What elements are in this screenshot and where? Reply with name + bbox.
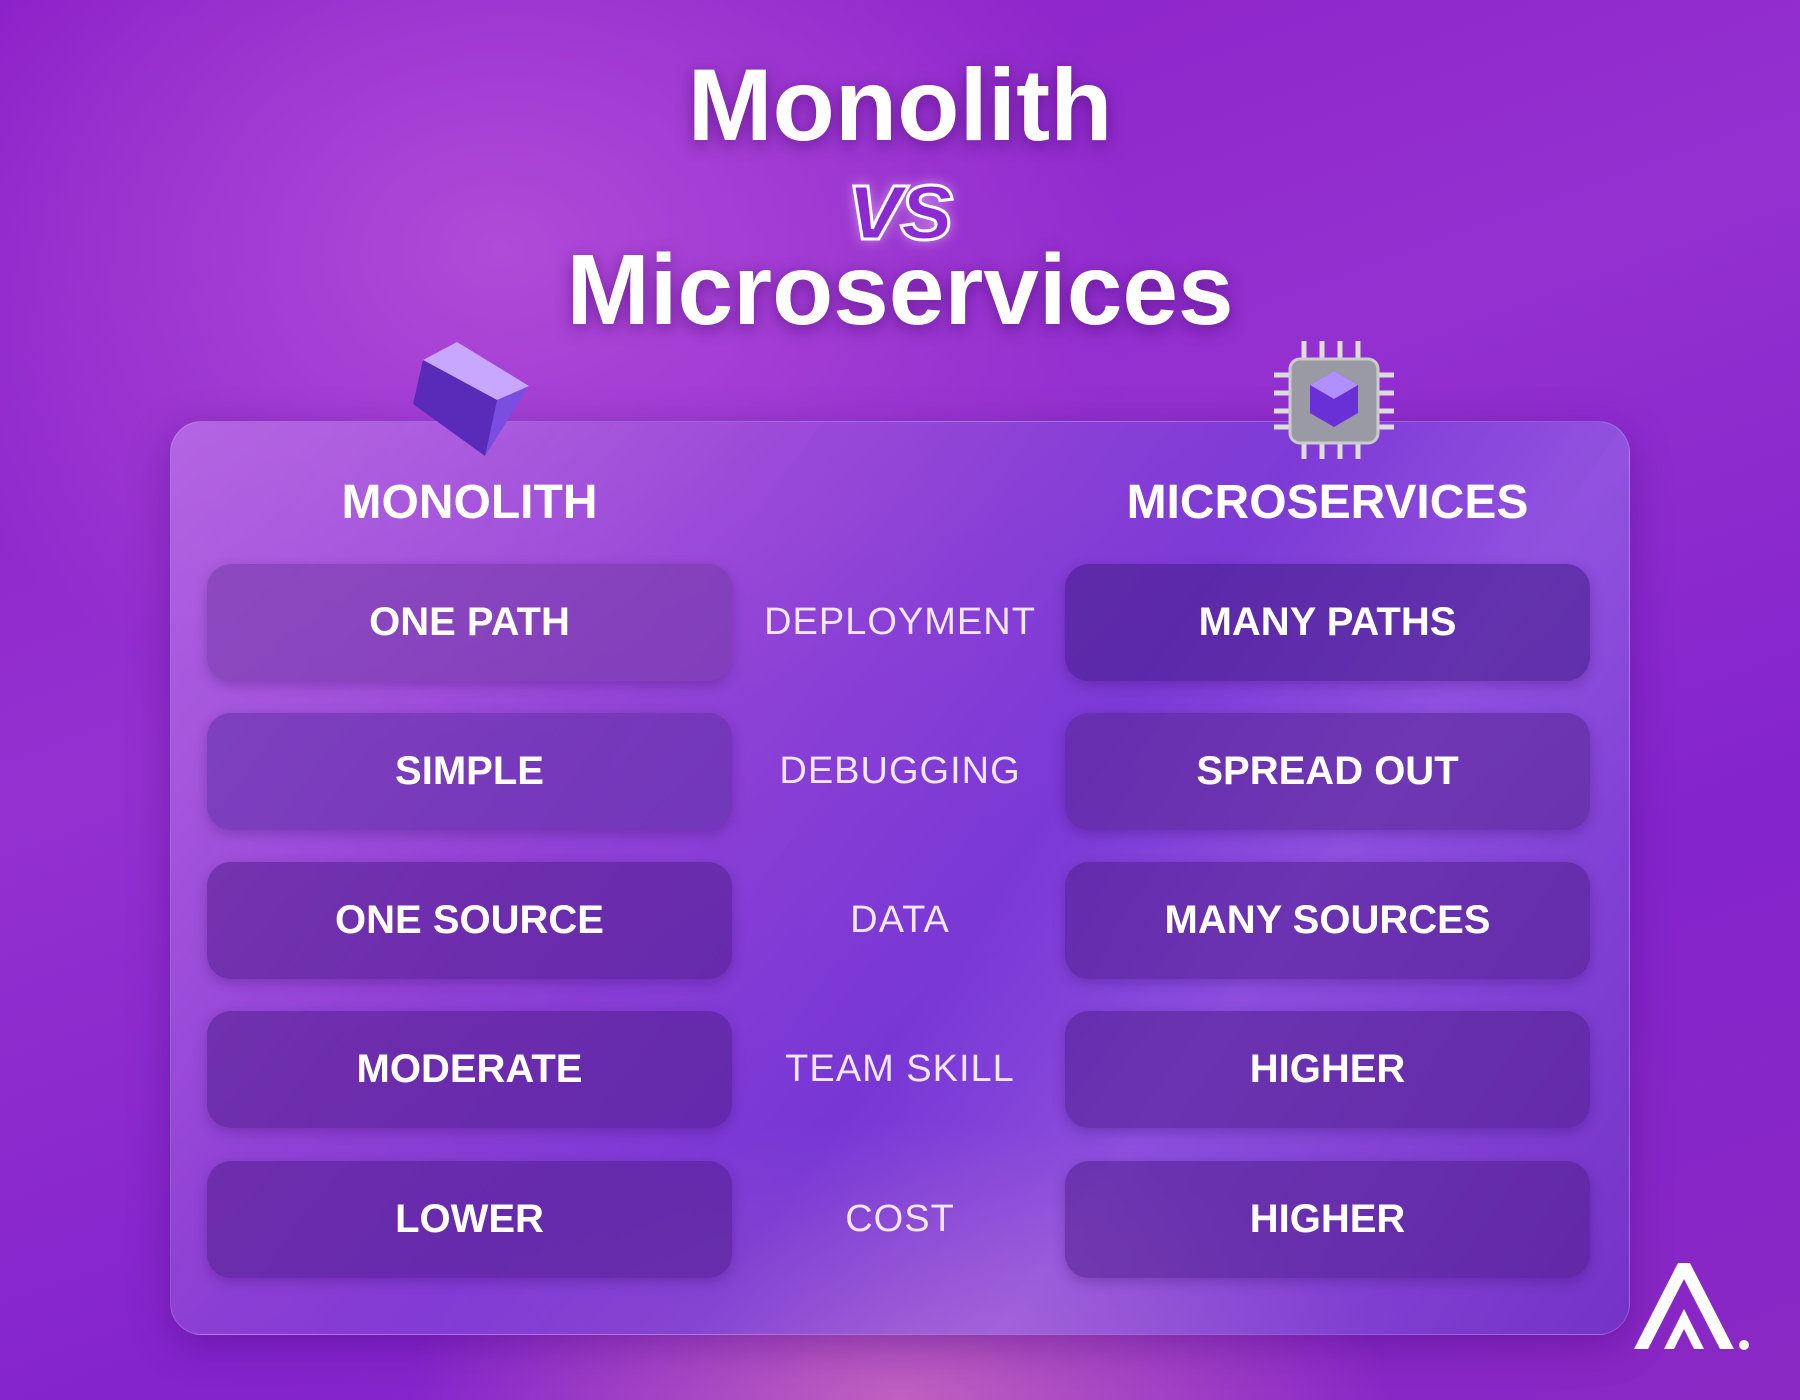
title: Monolith: Monolith bbox=[688, 48, 1112, 162]
logo bbox=[1634, 1263, 1749, 1350]
icon: chip bbox=[1274, 341, 1394, 459]
row: debugging bbox=[202, 712, 1594, 838]
panel: comparison bbox=[170, 421, 1630, 1335]
row: debugging: DEBUGGING bbox=[779, 750, 1021, 792]
row: team skill bbox=[202, 1010, 1594, 1136]
row: data: ONE SOURCE bbox=[335, 898, 604, 942]
row: cost: LOWER bbox=[395, 1197, 544, 1241]
row: cost bbox=[202, 1160, 1594, 1286]
row: team skill: HIGHER bbox=[1250, 1047, 1405, 1091]
row: team skill: MODERATE bbox=[357, 1047, 582, 1091]
row: debugging: SIMPLE bbox=[395, 749, 544, 793]
row: debugging: SPREAD OUT bbox=[1196, 749, 1459, 793]
row: deployment: ONE PATH bbox=[369, 600, 570, 644]
row: cost: HIGHER bbox=[1250, 1197, 1405, 1241]
row: data: DATA bbox=[850, 899, 950, 941]
title: vs: vs bbox=[848, 149, 952, 261]
row: team skill: TEAM SKILL bbox=[785, 1048, 1015, 1090]
row: cost: COST bbox=[845, 1198, 955, 1240]
row: deployment bbox=[202, 564, 1594, 690]
heading: MICROSERVICES: MICROSERVICES bbox=[1127, 476, 1528, 529]
row: deployment: MANY PATHS bbox=[1199, 600, 1456, 644]
row: data: MANY SOURCES bbox=[1164, 898, 1490, 942]
heading: MONOLITH: MONOLITH bbox=[342, 476, 597, 529]
icon: cube bbox=[413, 342, 529, 456]
title: Microservices: Microservices bbox=[566, 234, 1234, 346]
row: data bbox=[202, 862, 1594, 988]
row: deployment: DEPLOYMENT bbox=[764, 601, 1036, 643]
